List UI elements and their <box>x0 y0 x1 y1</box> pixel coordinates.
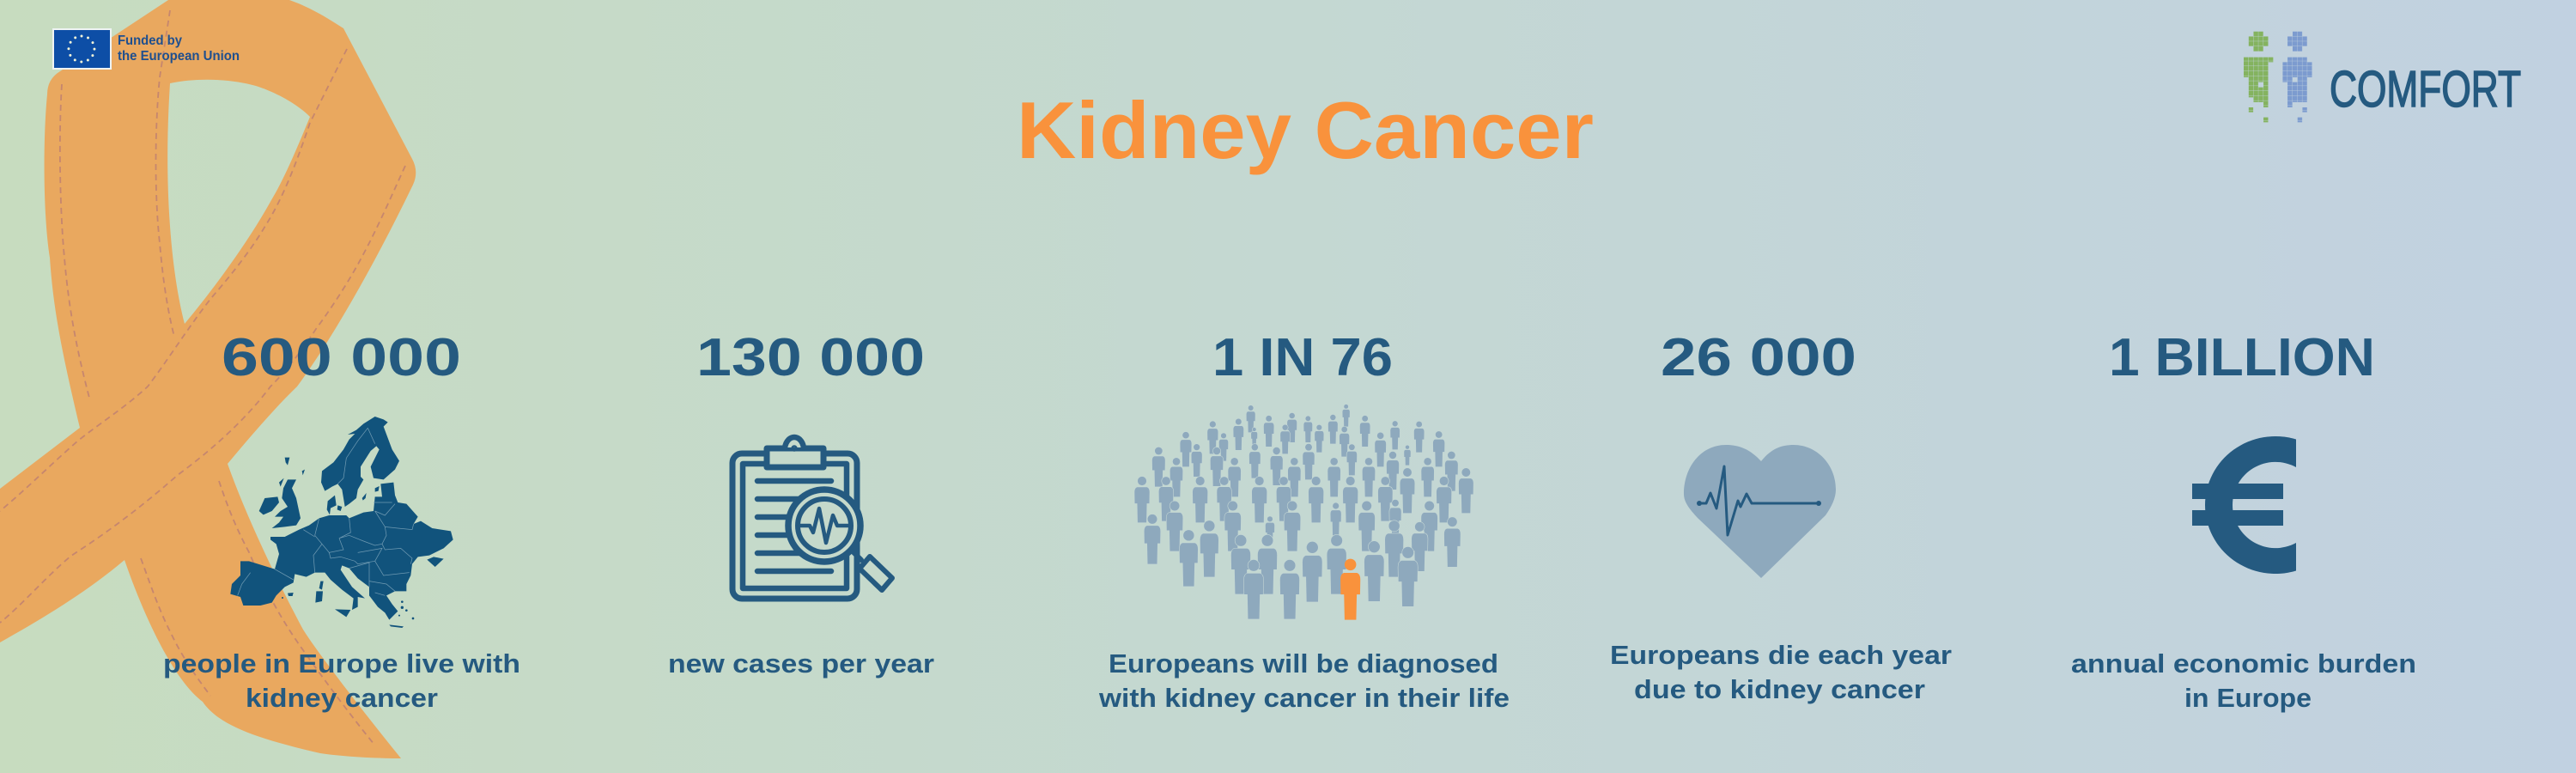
icon: EU flag <box>52 28 112 70</box>
icon: map of Europe <box>230 417 453 628</box>
label <box>1610 640 1952 704</box>
stat: 600 000: 600 000 <box>222 328 461 387</box>
panel: economic burden <box>2071 328 2416 713</box>
logo: funded by the EU <box>52 28 240 70</box>
title: Kidney Cancer <box>1017 85 1594 175</box>
label: people in Europe live with <box>163 648 520 679</box>
stat: 130 000: 130 000 <box>696 328 925 387</box>
icon: heart with pulse <box>1684 445 1836 578</box>
icon: crowd of people <box>1134 405 1473 620</box>
text: funded by: Funded by <box>118 33 182 48</box>
panel: new cases per year <box>668 328 934 679</box>
stat: 1 in 76: 1 IN 76 <box>1212 328 1393 387</box>
logo: COMFORT <box>2244 32 2521 122</box>
icon: highlighted orange person <box>1340 559 1360 620</box>
panel: lifetime risk <box>1098 328 1510 713</box>
panel: people living with kidney cancer <box>163 328 520 713</box>
stat: 1 billion: 1 BILLION <box>2109 328 2375 387</box>
awareness ribbon <box>0 0 416 758</box>
label: annual economic burden <box>2071 648 2416 679</box>
label: in Europe <box>2184 683 2312 713</box>
label <box>163 648 520 713</box>
label <box>1098 648 1510 713</box>
label: with kidney cancer in their life <box>1098 683 1510 713</box>
icon: pixel figures <box>2244 32 2312 122</box>
label: new cases per year <box>668 648 934 679</box>
icon: euro sign <box>2192 436 2296 574</box>
label: due to kidney cancer <box>1634 674 1925 704</box>
stat: 26 000: 26 000 <box>1661 328 1856 387</box>
label <box>2071 648 2416 713</box>
panel: deaths per year <box>1610 328 1952 704</box>
label: Europeans die each year <box>1610 640 1952 670</box>
label: kidney cancer <box>246 683 438 713</box>
icon: clipboard with magnifier <box>732 437 892 599</box>
text: the European Union: the European Union <box>118 49 240 64</box>
label: Europeans will be diagnosed <box>1109 648 1498 679</box>
